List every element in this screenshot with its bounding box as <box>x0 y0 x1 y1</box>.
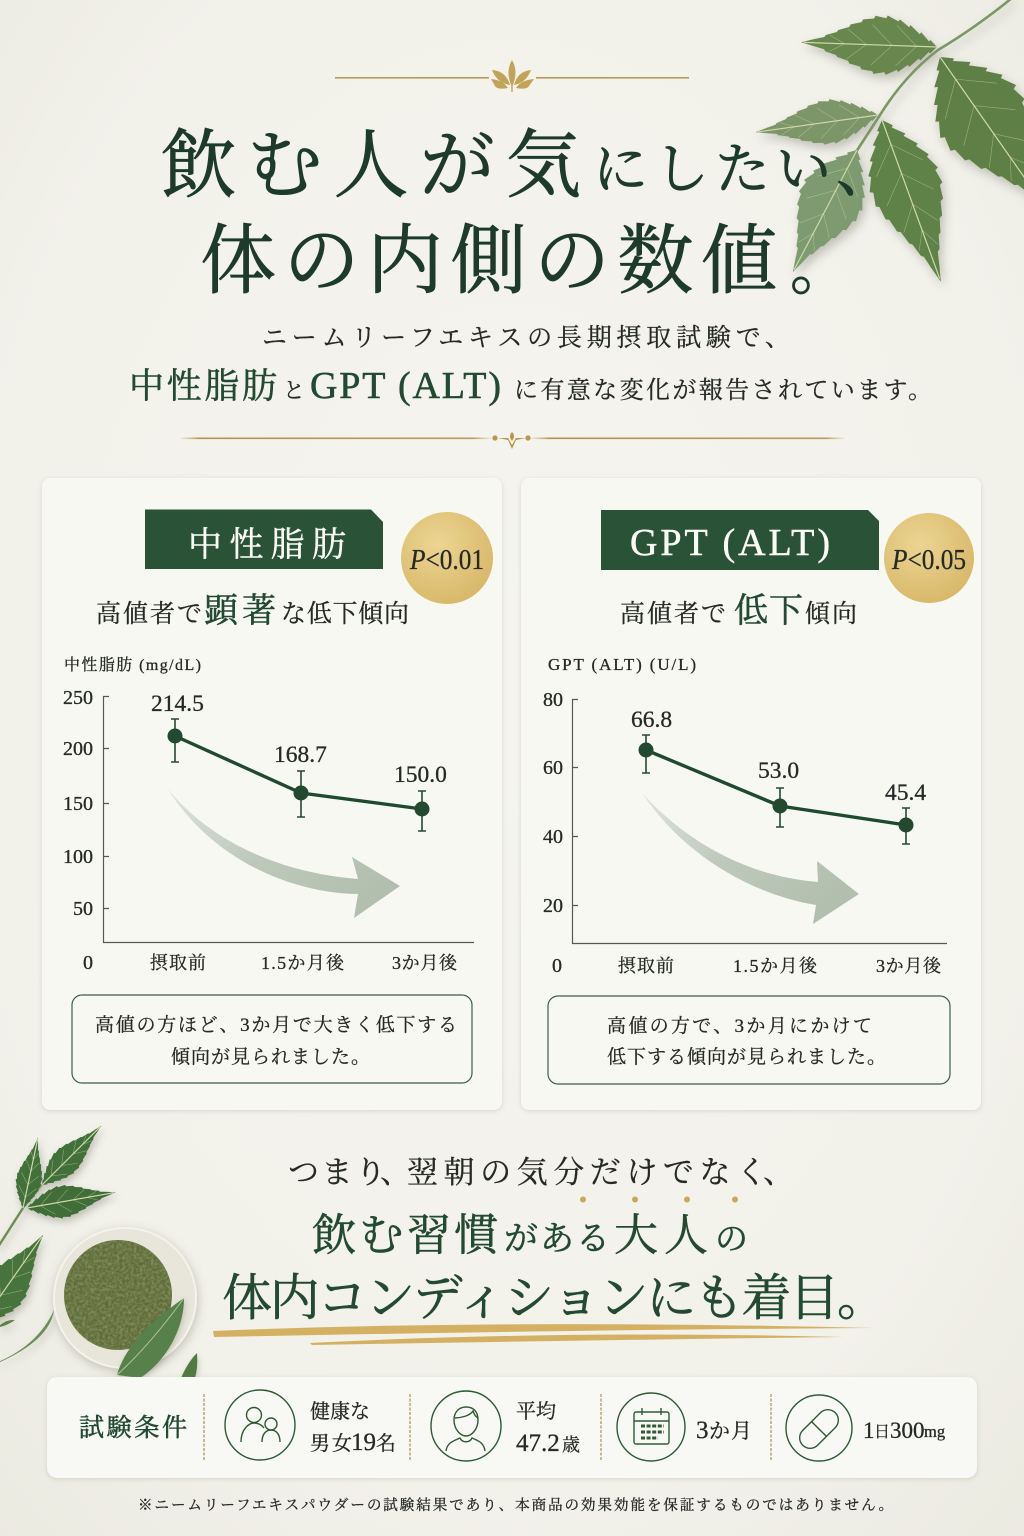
condition: daily dose: 300 <box>890 1418 924 1443</box>
panel: triglycerides <box>42 478 502 1110</box>
panel subheading: 高値者で <box>620 600 726 628</box>
line chart: GPT (ALT): 1.5か月後 <box>733 956 818 976</box>
conclusion message: がある <box>504 1221 610 1258</box>
subtitle: 中性脂肪 <box>129 367 277 406</box>
line chart: GPT (ALT): 45.4 <box>885 780 926 806</box>
line chart: GPT (ALT): 80 <box>543 689 563 711</box>
line chart: triglycerides: 150.0 <box>394 762 447 788</box>
condition: duration: 3 <box>696 1417 708 1444</box>
subtitle <box>129 324 932 407</box>
conclusion message: 大人 <box>614 1211 708 1260</box>
line chart: triglycerides: 中性脂肪 (mg/dL) <box>64 655 201 674</box>
condition: participants: 名 <box>376 1432 396 1455</box>
conclusion message: 飲む習慣 <box>312 1211 501 1260</box>
panel subheading <box>96 592 409 630</box>
panel: trial conditions <box>47 1377 977 1478</box>
conclusion message <box>213 1155 887 1345</box>
title: 飲む人が気 <box>161 125 581 208</box>
line chart: triglycerides: 150 <box>63 793 93 815</box>
condition: average age <box>431 1391 580 1461</box>
line chart: triglycerides: 50 <box>73 898 93 920</box>
subtitle: と <box>283 378 305 403</box>
note box <box>548 996 950 1084</box>
data line <box>638 735 914 844</box>
conclusion message: 、 <box>763 1155 794 1190</box>
panel: GPT (ALT) <box>521 478 981 1110</box>
line chart: GPT (ALT): GPT (ALT) (U/L) <box>548 655 696 674</box>
title: 。 <box>790 236 850 302</box>
emphasis dots <box>580 1196 738 1202</box>
significance seal p<0.01 <box>401 512 493 604</box>
conclusion message: 体内コンディションにも着目。 <box>222 1270 887 1326</box>
line chart: GPT (ALT): 66.8 <box>631 707 672 733</box>
trend arrow <box>642 793 859 924</box>
line chart: triglycerides: 250 <box>63 687 93 709</box>
panel subheading <box>620 593 857 630</box>
badge: GPT (ALT) <box>601 510 879 570</box>
leaf branch: top right <box>752 0 1024 294</box>
panel subheading: 傾向 <box>805 600 857 628</box>
subtitle: に有意な変化が報告されています。 <box>514 377 932 404</box>
condition: participants: 男女 <box>310 1432 352 1455</box>
condition: participants <box>225 1390 396 1460</box>
data line <box>168 719 430 831</box>
line chart: GPT (ALT): 3か月後 <box>876 956 942 976</box>
title: 体の内側の数値 <box>200 220 777 304</box>
panel subheading: 顕著 <box>204 592 276 630</box>
note box <box>72 995 472 1083</box>
gold divider <box>180 432 845 449</box>
conclusion message: 翌朝の気分だけでなく <box>407 1155 767 1190</box>
trend arrow <box>168 789 400 918</box>
significance seal p<0.05 <box>884 513 974 603</box>
powder bowl <box>54 1228 196 1368</box>
line chart: triglycerides: 168.7 <box>274 742 327 768</box>
line chart: GPT (ALT): 53.0 <box>758 758 799 784</box>
condition: average age: 歳 <box>562 1435 580 1455</box>
significance seal p<0.01: P<0.01 <box>409 544 484 576</box>
condition: daily dose: mg <box>924 1422 945 1441</box>
line chart: triglycerides: 200 <box>63 738 93 760</box>
badge: triglycerides <box>145 510 383 569</box>
note box: 低下する傾向が見られました。 <box>607 1046 886 1068</box>
note box: 高値の方ほど、3か月で大きく低下する <box>95 1014 457 1036</box>
line chart: GPT (ALT): 20 <box>543 895 563 917</box>
line chart: triglycerides: 0 <box>83 952 93 974</box>
panel subheading: 高値者で <box>96 600 202 628</box>
line chart: GPT (ALT) <box>543 655 947 977</box>
condition: duration <box>617 1393 752 1461</box>
condition: daily dose <box>786 1395 945 1461</box>
line chart: GPT (ALT): 0 <box>552 955 562 977</box>
subtitle: ニームリーフエキスの長期摂取試験で、 <box>262 324 790 352</box>
title: にしたい <box>593 139 831 200</box>
badge: GPT (ALT): GPT (ALT) <box>630 522 830 564</box>
subtitle: GPT (ALT) <box>310 365 501 407</box>
note box: 高値の方で、3か月にかけて <box>607 1015 872 1037</box>
condition: average age: 47.2 <box>516 1430 560 1457</box>
line chart: triglycerides: 214.5 <box>151 691 204 717</box>
panel subheading: な低下傾向 <box>281 600 409 628</box>
line chart: triglycerides <box>63 655 474 974</box>
condition: daily dose: 日 <box>874 1424 890 1441</box>
line chart: triglycerides: 100 <box>63 846 93 868</box>
gold brush underline <box>213 1324 874 1345</box>
title <box>161 125 894 304</box>
line chart: GPT (ALT): 60 <box>543 757 563 779</box>
line chart: triglycerides: 摂取前 <box>150 953 206 973</box>
badge: triglycerides: 中性脂肪 <box>188 526 346 564</box>
line chart: GPT (ALT): 40 <box>543 826 563 848</box>
conclusion message: つまり <box>288 1155 386 1190</box>
condition: duration: か月 <box>709 1419 752 1443</box>
footnote: ※ニームリーフエキスパウダーの試験結果であり、本商品の効果効能を保証するものではありません。 <box>138 1496 893 1514</box>
header ornament: gold leaf line <box>335 60 689 92</box>
condition: participants: 健康な <box>310 1400 370 1423</box>
condition: daily dose: 1 <box>863 1418 874 1443</box>
line chart: GPT (ALT): 摂取前 <box>618 956 674 976</box>
significance seal p<0.05: P<0.05 <box>891 544 966 576</box>
condition: average age: 平均 <box>516 1400 556 1423</box>
title: 、 <box>836 139 894 204</box>
conclusion message: 、 <box>380 1155 411 1190</box>
condition: participants: 19 <box>351 1429 376 1456</box>
note box: 傾向が見られました。 <box>171 1046 370 1068</box>
line chart: triglycerides: 3か月後 <box>392 953 458 973</box>
panel subheading: 低下 <box>734 593 803 630</box>
line chart: triglycerides: 1.5か月後 <box>261 953 345 973</box>
conclusion message: の <box>715 1222 748 1258</box>
conditions heading: 試験条件 <box>79 1414 187 1442</box>
botanical: leaves and powder bowl <box>0 1115 197 1378</box>
